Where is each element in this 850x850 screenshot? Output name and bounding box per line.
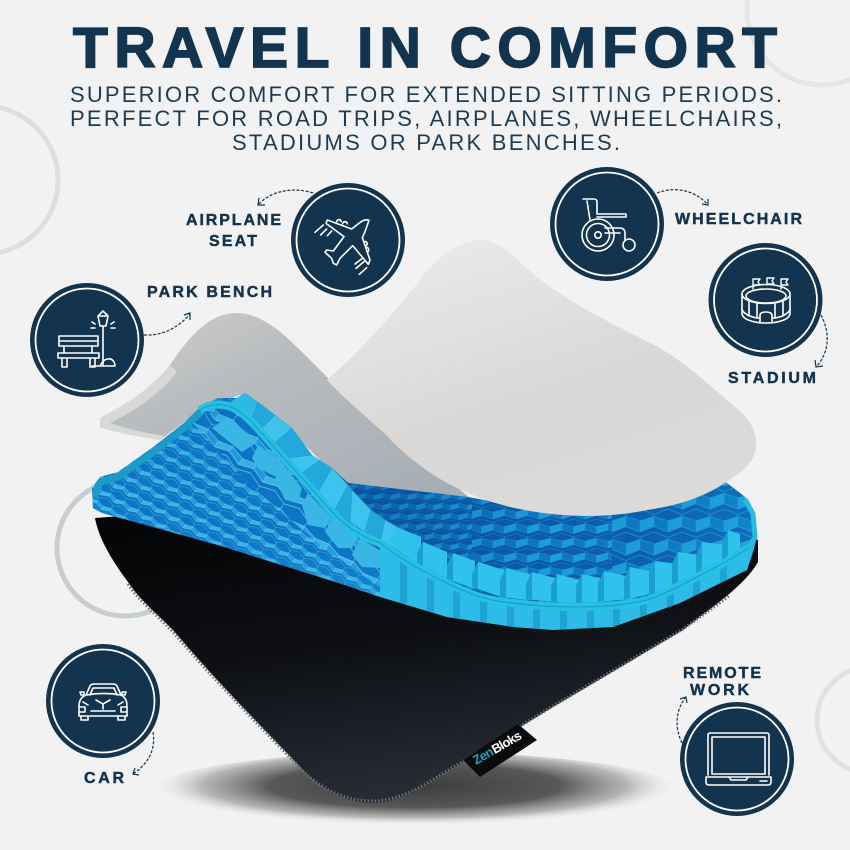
wheelchair label: WHEELCHAIR [675,211,802,228]
stadium label: STADIUM [728,370,816,387]
wheelchair arrow [657,190,708,205]
car callout [46,644,160,787]
airplane seat label: AIRPLANE [186,212,281,229]
brand tag: ZenBloks [470,728,524,768]
blue gel honeycomb [85,385,772,635]
large cells beside rim [212,417,382,568]
airplane seat callout [186,183,405,297]
gel right edge [745,499,755,548]
outer teeth on left slope [230,393,397,550]
top sheet: left fold [100,313,470,498]
left honeycomb [92,393,380,596]
wheelchair icon badge [550,167,664,281]
subtitle: SUPERIOR COMFORT FOR EXTENDED SITTING PERIODS. [70,82,782,107]
laptop icon badge [680,702,794,816]
subtitle: PERFECT FOR ROAD TRIPS, AIRPLANES, WHEELCHAIRS, [70,106,782,131]
front teeth above rim [391,527,740,603]
tooth shaded faces [417,530,728,603]
remote work label [683,665,761,699]
top sheet: right panel [327,240,756,516]
subtitle: STADIUMS OR PARK BENCHES. [232,130,620,155]
remote work label: WORK [690,682,749,699]
title: TRAVEL IN COMFORT [73,16,777,80]
park bench arrow [144,313,190,335]
wheelchair callout [550,167,802,281]
cushion product [85,240,772,803]
airplane seat label [186,212,281,250]
car label: CAR [84,770,124,787]
lower wall beneath rim [380,542,757,630]
remote work label: REMOTE [683,665,761,682]
park bench icon badge [30,283,144,397]
cushion shadow [150,752,680,832]
far honeycomb [330,470,772,630]
brand tag [463,724,537,777]
remote work callout [677,665,794,816]
remote work arrow [677,697,687,743]
park bench callout [30,283,272,397]
park bench label: PARK BENCH [147,284,272,301]
car arrow [133,732,154,775]
subtitle [70,82,782,155]
airplane seat label: SEAT [209,233,257,250]
gel raised rim [200,405,750,607]
upper left edge band [94,411,202,498]
car icon badge [46,644,160,758]
black base pad [95,510,758,803]
lower wall divisions [400,556,727,631]
airplane icon badge [291,183,405,297]
airplane seat arrow [258,190,313,205]
stadium icon badge [708,243,822,357]
stadium arrow [815,315,827,367]
stadium callout [708,243,827,387]
